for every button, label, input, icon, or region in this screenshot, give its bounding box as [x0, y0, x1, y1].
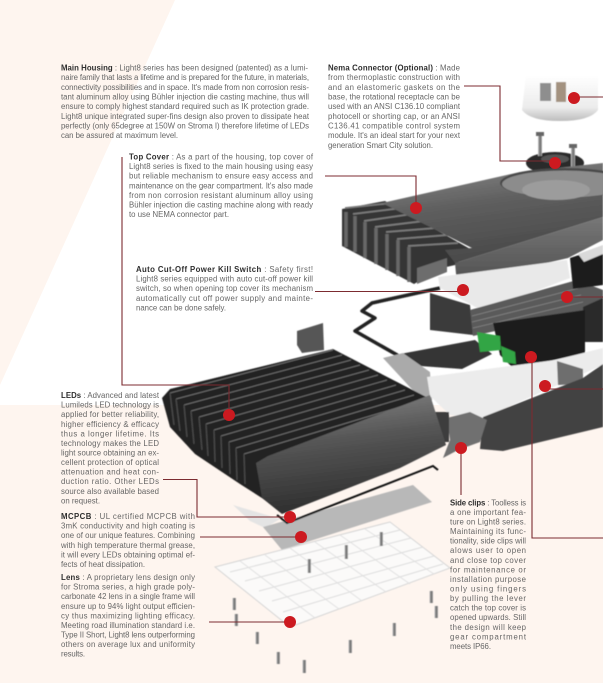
text: leds: technology makes the LED [61, 439, 159, 448]
text: main housing: can be assured at maximum level. [61, 131, 178, 140]
mcpcb plate [263, 485, 432, 550]
heat spreader [438, 260, 570, 311]
text: side clips: by pulling the lever [450, 594, 526, 603]
text: lens [61, 573, 195, 659]
text: mcpcb: with high temperature thermal grease, [60, 541, 195, 550]
text: lens: Meeting road illumination standard i.e. [61, 621, 195, 630]
text: nema connector: used with an ANSI C136.10 compliant [328, 102, 461, 111]
cover receptacle ring [500, 168, 603, 198]
callout: driver box [525, 351, 603, 538]
text: top cover: but reliable mechanism to ensure easy access and [129, 172, 313, 181]
callout: driver stack [561, 291, 603, 303]
text: side clips: catch the top cover is [450, 604, 526, 613]
callout: main housing [122, 157, 235, 421]
text: auto cut-off power kill switch: automatically cut off power supply and mainte- [136, 294, 313, 303]
top cover [342, 163, 603, 284]
gasket [355, 288, 440, 368]
text: nema connector: and an elastomeric gaskets on the [328, 83, 460, 92]
callout: lens [209, 616, 296, 628]
callout: side clips [455, 442, 467, 495]
text: leds: source also available based [61, 487, 159, 496]
callout: nema connector [464, 86, 561, 169]
text: lens: others on average lux and uniformity [61, 640, 195, 649]
driver left block [430, 293, 473, 335]
callout: leds [163, 480, 296, 523]
lower gasket [277, 466, 438, 523]
text: side clips: for maintenance or [450, 565, 526, 574]
translucent tray edge [383, 353, 432, 400]
text: auto cut-off power kill switch: Light8 series equipped with auto cut-off power kill [136, 275, 313, 284]
text: side clips: Maintaining its func- [450, 527, 526, 536]
front end cap [256, 395, 446, 514]
text: nema connector: generation Smart City solution. [328, 141, 433, 150]
text: leds: light source obtaining an ex- [61, 448, 159, 458]
text: auto cut-off power kill switch: Auto Cut-Off Power Kill Switch : Safety first! [136, 265, 313, 274]
text: leds: higher efficiency & efficacy [61, 420, 159, 429]
lens screws [232, 532, 438, 673]
text: lens: for Stroma series, a high grade poly- [61, 583, 195, 592]
text: nema connector: photocell or shorting cap, or an ANSI [328, 112, 460, 121]
lens array [215, 522, 450, 627]
photocell glass cap [522, 75, 598, 121]
text: top cover [129, 152, 314, 219]
text: auto cut-off power kill switch: nance can be done safely. [136, 303, 226, 312]
text: mcpcb: 3mK conductivity and high coating is [61, 522, 195, 531]
text: leds: cellent protection of optical [61, 458, 159, 467]
text: top cover: maintenance on the gear compartment. It's also made [129, 181, 313, 190]
right dark block [583, 298, 603, 342]
text: main housing: perfectly (only 65degree at 150W on Stroma I) therefore lifetime of LEDs [61, 122, 309, 130]
text: side clips: installation purpose [450, 575, 526, 584]
text: top cover: to use NEMA connector part. [129, 210, 229, 219]
text: lens: cy thus maximizing lighting efficacy. [61, 611, 195, 620]
text: lens: ensure up to 94% light output efficien- [61, 602, 195, 611]
text: lens: carbonate 42 lens in a single frame will [61, 592, 195, 601]
text: nema connector: C136.41 compatible control system [328, 122, 460, 130]
text: mcpcb: fects of heat dissipation. [61, 560, 145, 569]
callout: photocell [568, 92, 603, 104]
text: nema connector: from thermoplastic construction with [328, 73, 460, 82]
nema connector [526, 132, 584, 174]
text: nema connector: base, the rotational receptacle can be [328, 92, 460, 102]
text: main housing [61, 64, 310, 140]
text: main housing: connectivity possibilities and in space. It's made from non corrosion resis- [61, 83, 309, 92]
text: side clips: the design will keep [450, 623, 527, 632]
black driver box [493, 310, 585, 369]
text: side clips: ture on Light8 series. [450, 518, 526, 526]
text: side clips [450, 498, 527, 651]
text: leds [61, 391, 160, 505]
text: leds: thus a longer lifetime. Its [61, 429, 159, 438]
text: side clips: and close top cover [450, 556, 526, 565]
text: lens: Lens : A proprietary lens design only [61, 573, 195, 582]
text: lens: results. [61, 650, 85, 659]
outer wall [480, 364, 603, 451]
text: lens: Type II Short, Light8 lens outperforming [61, 630, 195, 640]
text: side clips: only using fingers [450, 584, 526, 594]
text: leds: on request. [61, 496, 100, 505]
top cover surface [382, 163, 603, 263]
text: leds: attenuation and heat con- [61, 468, 159, 477]
text: main housing: tant aluminum alloy using Bühler injection die casting machine, thus will [61, 92, 309, 102]
text: side clips: gear compartment [450, 632, 527, 641]
callout: mcpcb [200, 531, 307, 543]
text: main housing: naire family that lasts a lifetime and is prepared for the future, in materials, [61, 73, 309, 82]
text: top cover: from non corrosion resistant aluminum alloy using [129, 191, 313, 200]
text: mcpcb: MCPCB : UL certified MCPCB with [61, 512, 195, 521]
text: auto cut-off power kill switch: switch, so when opening top cover its mechanism [136, 284, 313, 293]
text: leds: applied for better reliability, [61, 410, 159, 419]
green connectors [477, 332, 501, 352]
gear compartment [400, 245, 603, 369]
text: side clips: meets IP66. [450, 642, 491, 651]
top cover front face [455, 217, 603, 284]
text: side clips: alows user to open [450, 546, 526, 555]
plate strip [233, 505, 280, 528]
clip tab [297, 323, 324, 353]
text: nema connector: Nema Connector (Optional) : Made [328, 64, 460, 72]
text: leds: LEDs : Advanced and latest [61, 391, 160, 400]
text: main housing: ensure to comply highest standard required such as IK protection grade. [61, 102, 309, 111]
rear tray [427, 348, 603, 418]
text: main housing: Main Housing : Light8 series has been designed (patented) as a lumi- [61, 64, 308, 72]
mounting bracket [557, 361, 583, 385]
text: leds: duction ratio. Other LEDs [61, 477, 159, 486]
text: nema connector [328, 64, 461, 150]
black terminal box [570, 247, 603, 289]
main housing rear [383, 348, 603, 451]
text: top cover: Light8 series is fixed to the main housing using easy [129, 162, 313, 171]
grey fin stack [470, 280, 603, 336]
text: auto cut-off power kill switch [136, 265, 313, 312]
text: mcpcb: one of our unique features. Combining [61, 531, 195, 540]
text: top cover: Bühler injection die casting machine along with ready [129, 200, 313, 210]
text: leds: Lumileds LED technology is [61, 401, 159, 410]
text: side clips: opened upwards. Still [450, 613, 526, 622]
text: side clips: tionality, side clips will [450, 537, 526, 546]
callout: auto cut-off switch [315, 284, 469, 296]
text: main housing: Light8 unique integrated super-fins design also proven to dissipate heat [61, 112, 310, 121]
text: side clips: Side clips : Toolless is [450, 498, 526, 507]
exploded luminaire diagram [162, 75, 603, 673]
text: mcpcb: it will every LEDs obtaining optimal ef- [61, 550, 195, 559]
text: top cover: Top Cover : As a part of the housing, top cover of [129, 152, 314, 162]
heat sink fins [162, 349, 432, 500]
callout: rear housing [539, 380, 603, 392]
text: nema connector: module. It's an ideal start for your next [328, 131, 461, 140]
text: mcpcb [60, 512, 195, 569]
flat dark lid [400, 340, 492, 369]
text: side clips: a one important fea- [450, 508, 526, 517]
callout: top cover [325, 176, 422, 214]
top cover fins [342, 201, 472, 284]
side clip [432, 412, 487, 458]
